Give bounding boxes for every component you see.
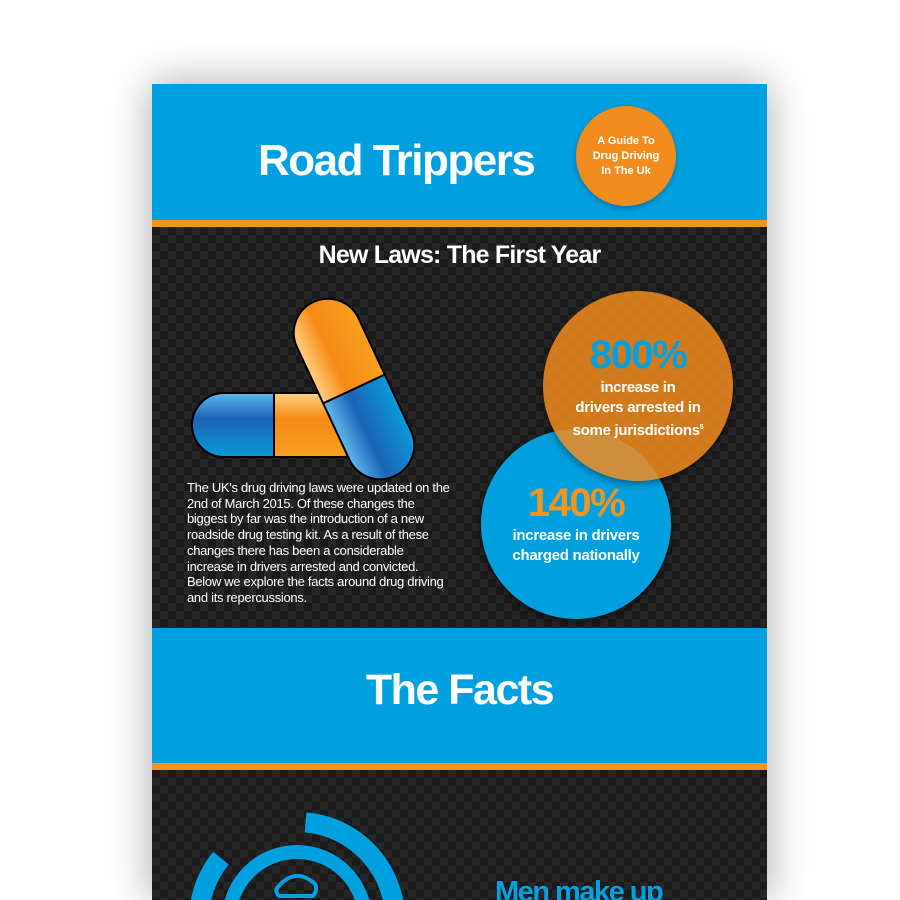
stat circle: 140%: increase in drivers xyxy=(513,527,639,544)
title: Road Trippers xyxy=(258,136,534,185)
stat circle: 140%: 140% xyxy=(528,481,624,525)
stat circle: 800%: drivers arrested in xyxy=(575,399,701,416)
stat circle: 800%: 800% xyxy=(590,333,686,377)
stat circle: 800% xyxy=(543,291,733,481)
header band xyxy=(152,84,767,220)
panel: new laws xyxy=(152,227,767,628)
facts header band xyxy=(152,628,767,763)
badge xyxy=(576,106,676,206)
heading: the facts: The Facts xyxy=(366,666,553,714)
chart: gender ring xyxy=(190,812,404,900)
stat circle: 140% xyxy=(481,429,671,619)
stat circle: 800%: increase in xyxy=(600,379,676,396)
badge: Drug Driving xyxy=(593,150,659,162)
stat circle: 800%: some jurisdictions5 xyxy=(573,422,703,439)
panel: facts xyxy=(152,770,767,900)
heading: New Laws: The First Year xyxy=(319,241,600,269)
infographic panel xyxy=(152,84,767,900)
icon: pills xyxy=(191,298,416,480)
text block: intro: The UK's drug driving laws were updated on the 2nd of March 2015. Of these changes the biggest by far was the introduction of a new roadside drug testing kit. As a result of these changes there has been a considerable increase in drivers arrested and convicted. Below we explore the facts around drug driving and its repercussions. xyxy=(187,480,450,605)
stat circle: 140%: charged nationally xyxy=(512,547,640,564)
badge: In The Uk xyxy=(601,165,651,177)
badge: A Guide To xyxy=(597,135,655,147)
